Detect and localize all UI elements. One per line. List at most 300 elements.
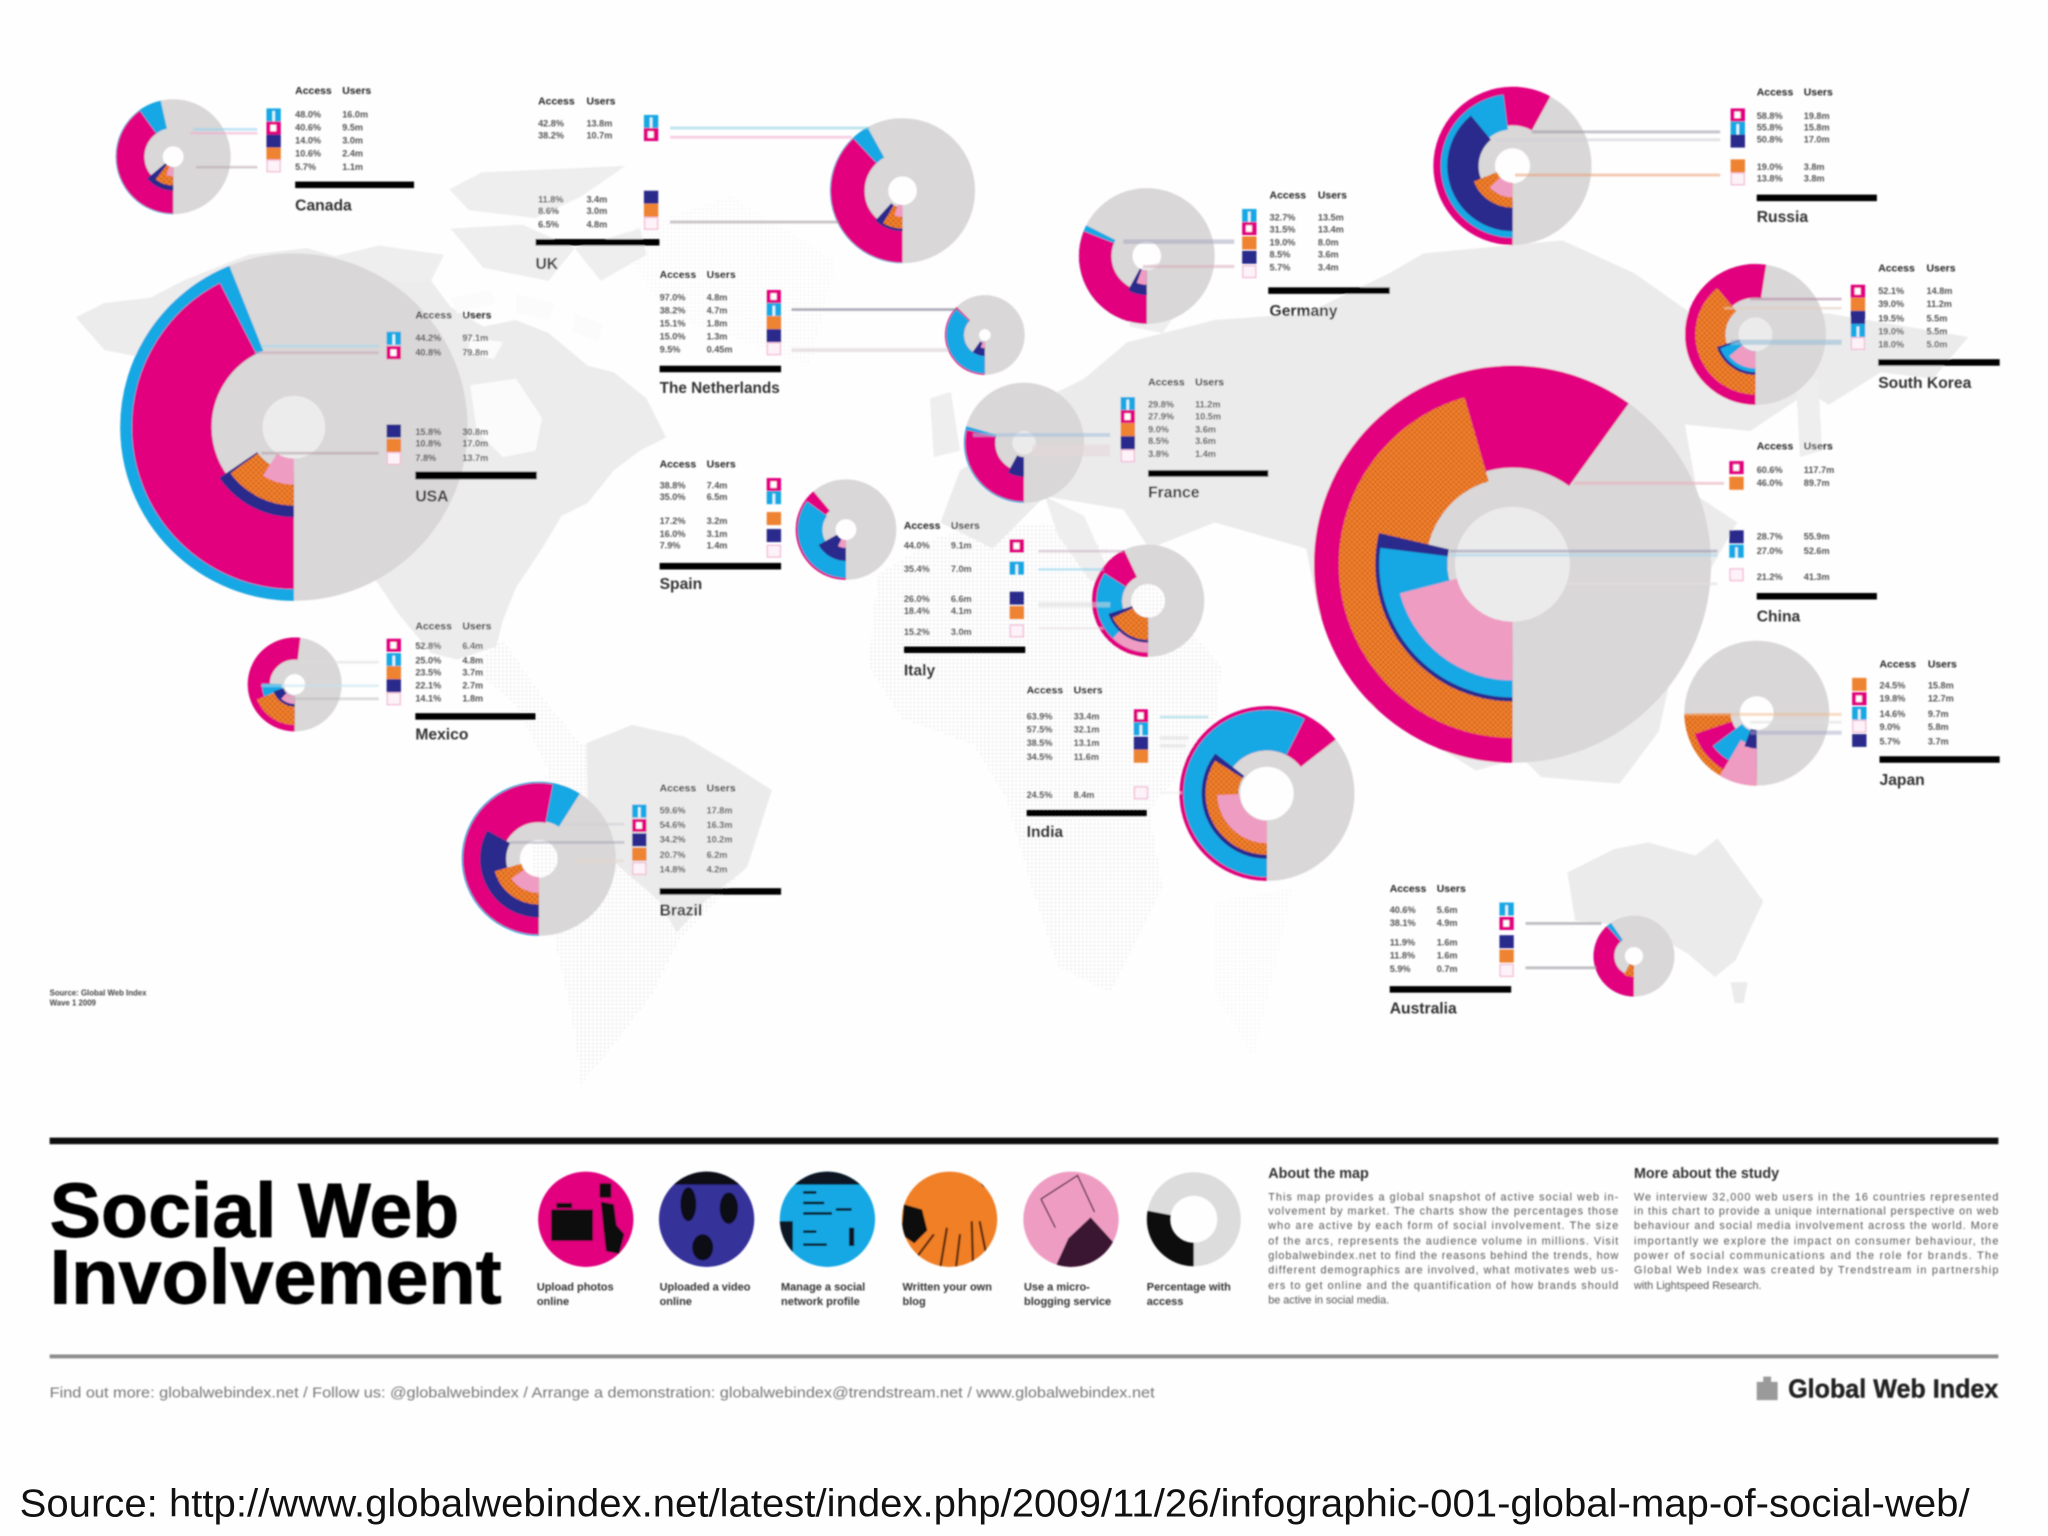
source line: Source: http://www.globalwebindex.net/latest/index.php/2009/11/26/infographic-001-global-map-of-social-web/: [20, 1482, 1970, 1525]
legend: China: 117.7m: [1804, 465, 1834, 475]
leader lines: Brazil: [509, 824, 624, 861]
legend: Japan: 19.8%: [1880, 693, 1905, 703]
legend: France: 29.8%: [1148, 400, 1174, 410]
country name: Brazil: Brazil: [660, 903, 702, 920]
legend: France: 3.6m: [1195, 424, 1216, 434]
icon: micro-blogging: [1023, 1172, 1119, 1267]
legend bar: India: [1027, 810, 1147, 816]
icon labels: Manage a social: [781, 1281, 865, 1293]
text block: More about the study: We interview 32,000 web users in the 16 countries represented: [1634, 1191, 1998, 1203]
leader lines: France: [973, 435, 1110, 451]
legend: Australia: 0.7m: [1437, 964, 1458, 974]
icon labels: Percentage with: [1147, 1281, 1231, 1293]
legend: China: 21.2%: [1757, 572, 1783, 582]
legend: Italy: 9.1m: [951, 541, 972, 551]
leader lines: UK: [670, 128, 870, 222]
panel: India: [1027, 686, 1332, 859]
legend: USA: [387, 311, 492, 464]
chart: Canada: [130, 114, 216, 200]
legend: Russia: 50.8%: [1757, 134, 1783, 144]
map: Central and South America dotted: [470, 640, 772, 1084]
legend: UK: 3.0m: [586, 206, 607, 216]
legend bar: Canada: [295, 182, 414, 188]
legend: Germany: 13.4m: [1318, 224, 1344, 234]
legend: Russia: Access: [1757, 87, 1793, 98]
map: Brazil: [586, 725, 772, 933]
leader lines: Mexico: [261, 662, 379, 699]
legend: Mexico: Access: [415, 622, 452, 633]
legend: UK: Access: [538, 96, 575, 107]
legend: USA: 13.7m: [462, 453, 488, 463]
legend: China: 28.7%: [1757, 531, 1783, 541]
country name: Australia: Australia: [1390, 1001, 1457, 1018]
panel: France: [973, 377, 1268, 502]
legend: Germany: 8.5%: [1270, 249, 1290, 259]
chart: Italy: [1104, 557, 1192, 645]
legend: UK: 8.6%: [538, 206, 559, 216]
country name: Germany: Germany: [1270, 303, 1338, 320]
legend bar: USA: [415, 472, 537, 479]
legend: Japan: 14.6%: [1880, 709, 1905, 719]
legend: The Netherlands: 38.2%: [660, 305, 685, 315]
legend: France: 8.5%: [1148, 436, 1169, 446]
panel: Australia: [1390, 884, 1664, 1018]
legend: Germany: 19.0%: [1270, 238, 1295, 248]
legend: The Netherlands: [660, 270, 781, 355]
legend: India: 8.4m: [1074, 790, 1094, 800]
legend: Brazil: 16.3m: [707, 820, 732, 830]
legend: Italy: 18.4%: [904, 606, 930, 616]
icon: upload photos: [538, 1172, 633, 1267]
legend: Spain: [660, 460, 781, 557]
legend: Germany: Access: [1270, 191, 1306, 202]
icon labels: Use a micro-: [1024, 1281, 1090, 1293]
panel: UK: [536, 96, 958, 273]
legend: Mexico: 23.5%: [415, 667, 441, 677]
panel: South Korea: [1702, 264, 2000, 392]
legend: Spain: 38.8%: [660, 480, 685, 490]
text block: About the map: [1267, 1166, 1619, 1307]
legend: Russia: 13.8%: [1757, 174, 1783, 184]
text block: More about the study: [1633, 1166, 1998, 1292]
legend: India: Access: [1027, 686, 1063, 697]
icon: upload video: [658, 1170, 755, 1267]
legend icons row: [537, 1170, 1231, 1308]
legend: The Netherlands: 4.8m: [707, 292, 727, 302]
legend: Japan: Users: [1928, 659, 1957, 670]
legend: China: [1729, 441, 1834, 582]
legend: China: 27.0%: [1757, 546, 1783, 556]
legend: China: 55.9m: [1804, 531, 1830, 541]
text block: More about the study: importantly we explore the impact on consumer behaviour, the: [1634, 1236, 1998, 1248]
legend: South Korea: 5.0m: [1927, 339, 1947, 349]
legend: Germany: 31.5%: [1270, 224, 1295, 234]
legend: China: 52.6m: [1804, 546, 1830, 556]
legend: China: Access: [1757, 441, 1793, 452]
legend: China: 60.6%: [1757, 465, 1783, 475]
text block: More about the study: behaviour and social media involvement across the world. More: [1634, 1220, 1998, 1232]
legend: Russia: 55.8%: [1757, 123, 1783, 133]
legend: USA: Access: [415, 311, 452, 322]
legend: France: 11.2m: [1195, 400, 1220, 410]
legend: South Korea: Users: [1927, 264, 1956, 275]
legend: Germany: Users: [1318, 191, 1347, 202]
legend: Germany: 3.4m: [1318, 262, 1339, 272]
legend: Brazil: 14.8%: [660, 864, 685, 874]
legend: Spain: 35.0%: [660, 492, 685, 502]
text block: About the map: different demographics are involved, what motivates web us-: [1268, 1264, 1619, 1276]
legend: India: 38.5%: [1027, 738, 1052, 748]
legend: Brazil: 34.2%: [660, 834, 685, 844]
panel: Germany: [1095, 191, 1390, 320]
legend: The Netherlands: 0.45m: [707, 345, 732, 355]
chart: Australia: [1604, 926, 1664, 986]
legend: Australia: [1390, 884, 1514, 976]
legend bar: Japan: [1880, 756, 2000, 763]
legend: France: 3.6m: [1195, 436, 1216, 446]
icon labels: [537, 1281, 1231, 1308]
legend bar: France: [1148, 470, 1268, 477]
legend: USA: 40.8%: [415, 347, 441, 357]
legend: The Netherlands: Users: [707, 270, 736, 281]
legend: Spain: 6.5m: [707, 492, 727, 502]
legend: South Korea: 19.5%: [1878, 313, 1904, 323]
legend: USA: 17.0m: [462, 439, 488, 449]
map source note: Source: Global Web Index: [50, 988, 147, 997]
legend: USA: 79.8m: [462, 347, 488, 357]
legend: India: [1027, 686, 1148, 800]
legend: India: 57.5%: [1027, 725, 1052, 735]
legend: Italy: 26.0%: [904, 594, 930, 604]
legend: Australia: 5.9%: [1390, 964, 1411, 974]
legend bar: UK: [536, 239, 660, 246]
icon labels: blogging service: [1024, 1296, 1111, 1308]
legend: South Korea: 5.5m: [1927, 326, 1947, 336]
country name: UK: UK: [536, 256, 559, 273]
legend: The Netherlands: 9.5%: [660, 345, 680, 355]
legend: South Korea: 14.8m: [1927, 286, 1952, 296]
legend bar: Russia: [1757, 195, 1877, 201]
legend: Japan: 9.0%: [1880, 722, 1900, 732]
legend: Canada: [266, 86, 371, 172]
chart: India: [1202, 728, 1332, 859]
icon labels: online: [660, 1296, 692, 1308]
legend: Australia: Users: [1437, 884, 1466, 895]
legend: Japan: 3.7m: [1928, 736, 1949, 746]
text block: More about the study: in this chart to provide a unique international perspective on web: [1634, 1206, 1998, 1218]
panel: The Netherlands: [660, 270, 1015, 397]
map: Arctic islands: [313, 166, 647, 281]
country name: Mexico: Mexico: [415, 726, 468, 743]
legend bar: Mexico: [415, 713, 536, 720]
chart: Russia: [1453, 106, 1572, 226]
legend: Italy: Access: [904, 521, 941, 532]
legend: France: 9.0%: [1148, 424, 1169, 434]
country name: Japan: Japan: [1880, 772, 1925, 789]
legend: UK: 3.4m: [586, 194, 607, 204]
legend: Japan: 12.7m: [1928, 693, 1954, 703]
legend: Japan: 15.8m: [1928, 680, 1954, 690]
country name: Spain: Spain: [660, 576, 702, 593]
map: North America: [76, 248, 666, 660]
leader lines: Australia: [1526, 923, 1601, 968]
text block: More about the study: More about the study: [1634, 1166, 1779, 1182]
legend: USA: 97.1m: [462, 333, 488, 343]
panel: Russia: [1453, 87, 1877, 226]
leader lines: Germany: [1123, 242, 1234, 266]
legend: Mexico: 3.7m: [462, 667, 483, 677]
legend: Spain: 7.9%: [660, 541, 680, 551]
country name: USA: USA: [415, 489, 448, 506]
icon: written blog: [901, 1170, 1006, 1267]
legend: Brazil: 6.2m: [707, 850, 727, 860]
map: Africa dotted: [869, 522, 1221, 993]
legend: Spain: 3.2m: [707, 516, 727, 526]
logo: Global Web Index: Global Web Index: [1788, 1374, 1999, 1404]
legend: India: 13.1m: [1074, 738, 1100, 748]
legend: Brazil: 4.2m: [707, 864, 727, 874]
panel: Italy: [904, 521, 1192, 679]
icon: percentage with access: [1159, 1184, 1229, 1255]
legend: The Netherlands: 15.0%: [660, 332, 685, 342]
legend: Russia: 58.8%: [1757, 111, 1783, 121]
map: Scandinavia and UK: [930, 255, 1195, 457]
legend: Brazil: 20.7%: [660, 850, 685, 860]
legend: Germany: 5.7%: [1270, 262, 1290, 272]
legend: Australia: 38.1%: [1390, 918, 1416, 928]
legend: Australia: Access: [1390, 884, 1426, 895]
legend: Russia: [1731, 87, 1833, 185]
text block: About the map: ers to get online and the quantification of how brands should: [1268, 1280, 1618, 1292]
legend: USA: 15.8%: [415, 427, 441, 437]
legend: Mexico: 4.8m: [462, 656, 483, 666]
icon labels: Upload photos: [537, 1281, 614, 1293]
leader lines: Japan: [1685, 714, 1842, 733]
legend: Mexico: 6.4m: [462, 641, 483, 651]
legend: Brazil: [632, 784, 736, 874]
country name: India: India: [1027, 824, 1063, 841]
legend: Spain: 16.0%: [660, 529, 685, 539]
map source note: Wave 1 2009: [50, 999, 97, 1008]
legend: Russia: Users: [1804, 87, 1833, 98]
leader lines: USA: [255, 346, 379, 453]
legend: India: 33.4m: [1074, 712, 1100, 722]
map: Tasmania: [1731, 982, 1748, 1003]
legend: Germany: 8.0m: [1318, 238, 1339, 248]
text block: More about the study: Global Web Index was created by Trendstream in partnership: [1634, 1264, 1998, 1276]
legend: Canada: 3.0m: [342, 136, 363, 146]
legend: Australia: 1.6m: [1437, 951, 1458, 961]
legend bar: Italy: [904, 647, 1025, 653]
legend: Russia: 3.8m: [1804, 162, 1825, 172]
legend: Brazil: 17.8m: [707, 806, 732, 816]
leader lines: The Netherlands: [792, 310, 957, 350]
legend: India: 24.5%: [1027, 790, 1052, 800]
legend: Canada: 2.4m: [342, 149, 363, 159]
chart: Germany: [1095, 204, 1198, 308]
legend: The Netherlands: 97.0%: [660, 292, 685, 302]
legend: France: 1.4m: [1195, 449, 1216, 459]
text block: More about the study: with Lightspeed Research.: [1633, 1280, 1762, 1292]
panel: Brazil: [481, 784, 781, 920]
legend: UK: 13.8m: [586, 119, 612, 129]
chart: Spain: [808, 492, 884, 567]
legend: France: 10.5m: [1195, 411, 1221, 421]
text block: About the map: globalwebindex.net to find the reasons behind the trends, how: [1268, 1250, 1618, 1262]
legend: South Korea: 52.1%: [1878, 286, 1904, 296]
legend bar: Spain: [660, 563, 781, 569]
text block: More about the study: power of social communications and the role for brands. The: [1634, 1250, 1998, 1262]
text block: About the map: This map provides a global snapshot of active social web in-: [1268, 1191, 1619, 1203]
icon labels: Written your own: [903, 1281, 992, 1293]
map: Italy: [1045, 496, 1110, 581]
country name: The Netherlands: The Netherlands: [660, 380, 780, 397]
legend: Japan: 5.8m: [1928, 722, 1949, 732]
legend: India: 11.6m: [1074, 752, 1099, 762]
legend: Germany: 13.5m: [1318, 213, 1344, 223]
map: Australia: [1567, 839, 1763, 977]
legend: Canada: 10.6%: [295, 149, 321, 159]
legend: UK: 10.7m: [586, 130, 612, 140]
legend: The Netherlands: 1.8m: [707, 319, 727, 329]
legend: China: 89.7m: [1804, 478, 1830, 488]
legend: France: [1121, 377, 1224, 462]
legend: UK: 11.8%: [538, 194, 563, 204]
legend: France: Access: [1148, 377, 1185, 388]
icon labels: online: [537, 1296, 569, 1308]
legend: UK: Users: [586, 96, 616, 107]
legend: The Netherlands: 4.7m: [707, 305, 727, 315]
legend: France: 3.8%: [1148, 449, 1169, 459]
legend: France: Users: [1195, 377, 1224, 388]
chart: Brazil: [481, 801, 596, 916]
legend: Australia: 11.8%: [1390, 951, 1415, 961]
legend: Italy: 7.0m: [951, 564, 972, 574]
legend: Italy: 6.6m: [951, 594, 972, 604]
legend: Italy: 4.1m: [951, 606, 972, 616]
legend: Germany: [1242, 191, 1347, 278]
legend: South Korea: 18.0%: [1878, 339, 1904, 349]
legend: The Netherlands: 15.1%: [660, 319, 685, 329]
icon labels: blog: [903, 1296, 926, 1308]
legend: The Netherlands: 1.3m: [707, 332, 727, 342]
legend: Canada: 40.6%: [295, 123, 321, 133]
country name: Canada: Canada: [295, 197, 352, 214]
legend: Japan: 9.7m: [1928, 709, 1949, 719]
legend: Spain: Users: [707, 460, 736, 471]
chart: UK: [847, 136, 958, 246]
legend: Spain: 3.1m: [707, 529, 727, 539]
legend: Russia: 17.0m: [1804, 134, 1830, 144]
legend: Brazil: Access: [660, 784, 696, 795]
leader lines: Italy: [1038, 551, 1123, 628]
panel: Japan: [1685, 659, 2000, 789]
title: Social Web: [50, 1168, 459, 1254]
leader lines: Russia: [1496, 132, 1720, 175]
legend: Germany: 32.7%: [1270, 213, 1295, 223]
legend: India: Users: [1074, 686, 1103, 697]
icon labels: Uploaded a video: [660, 1281, 751, 1293]
leader lines: China: [1450, 483, 1724, 584]
legend: Japan: [1852, 659, 1957, 747]
legend: South Korea: 11.2m: [1927, 299, 1952, 309]
legend: Brazil: 54.6%: [660, 820, 685, 830]
country name: Italy: Italy: [904, 662, 935, 679]
legend bar: South Korea: [1878, 359, 2000, 366]
legend: Mexico: 25.0%: [415, 656, 441, 666]
legend bar: Germany: [1268, 287, 1390, 294]
legend: Brazil: Users: [707, 784, 736, 795]
text block: About the map: who are active by each form of social involvement. The size: [1267, 1220, 1618, 1232]
legend: UK: 38.2%: [538, 130, 564, 140]
footer links: Find out more: globalwebindex.net / Follow us: @globalwebindex / Arrange a demonstration: globalwebindex@trendstream.net / www.globalwebindex.net: [50, 1385, 1156, 1402]
legend: Italy: Users: [951, 521, 980, 532]
legend: India: 32.1m: [1074, 725, 1100, 735]
legend: USA: 7.8%: [415, 453, 436, 463]
legend: Australia: 11.9%: [1390, 938, 1415, 948]
legend: Spain: Access: [660, 460, 696, 471]
legend: South Korea: 39.0%: [1878, 299, 1904, 309]
legend: France: 27.9%: [1148, 411, 1174, 421]
legend: Canada: 14.0%: [295, 136, 321, 146]
legend: China: 46.0%: [1757, 478, 1783, 488]
legend: UK: 42.8%: [538, 119, 564, 129]
legend: South Korea: 19.0%: [1878, 326, 1904, 336]
legend: Italy: 3.0m: [951, 627, 972, 637]
legend: Mexico: 14.1%: [415, 693, 441, 703]
top rule of footer panel: [50, 1138, 1998, 1144]
legend: Mexico: 52.8%: [415, 641, 441, 651]
legend: Spain: 7.4m: [707, 480, 727, 490]
legend: Canada: 16.0m: [342, 110, 368, 120]
map: Japan: [1796, 379, 1822, 457]
leader lines: South Korea: [1724, 299, 1842, 342]
legend: Russia: 19.8m: [1804, 111, 1830, 121]
map: Hudson Bay and Canadian channels: [451, 290, 603, 457]
legend: UK: [538, 96, 658, 229]
legend: USA: 30.8m: [462, 427, 488, 437]
legend bar: The Netherlands: [660, 366, 781, 372]
legend: Japan: 24.5%: [1880, 680, 1905, 690]
legend: South Korea: [1851, 264, 1956, 349]
legend: Italy: 15.2%: [904, 627, 930, 637]
legend: South Korea: Access: [1878, 264, 1915, 275]
legend: Germany: 3.6m: [1318, 249, 1339, 259]
chart: Mexico: [259, 648, 331, 720]
icon: social network profile: [778, 1170, 875, 1267]
legend: Mexico: 22.1%: [415, 680, 441, 690]
chart: South Korea: [1702, 281, 1809, 388]
legend: China: Users: [1804, 441, 1833, 452]
legend: India: 63.9%: [1027, 712, 1052, 722]
legend: Italy: 44.0%: [904, 541, 930, 551]
country name: France: France: [1148, 485, 1200, 502]
legend: Australia: 1.6m: [1437, 938, 1458, 948]
legend: India: 34.5%: [1027, 752, 1052, 762]
legend: USA: 10.8%: [415, 439, 441, 449]
legend: Mexico: 1.8m: [462, 693, 483, 703]
legend: Brazil: 10.2m: [707, 834, 732, 844]
title: Involvement: [50, 1235, 502, 1321]
legend: Italy: [904, 521, 1024, 637]
legend: The Netherlands: Access: [660, 270, 696, 281]
legend: Australia: 5.6m: [1437, 905, 1458, 915]
title: [50, 1168, 502, 1321]
chart: The Netherlands: [954, 305, 1015, 365]
legend: Japan: Access: [1880, 659, 1916, 670]
map: dotted oceans and Atlantic stipple: [614, 196, 1293, 1058]
chart: USA: [166, 299, 422, 555]
